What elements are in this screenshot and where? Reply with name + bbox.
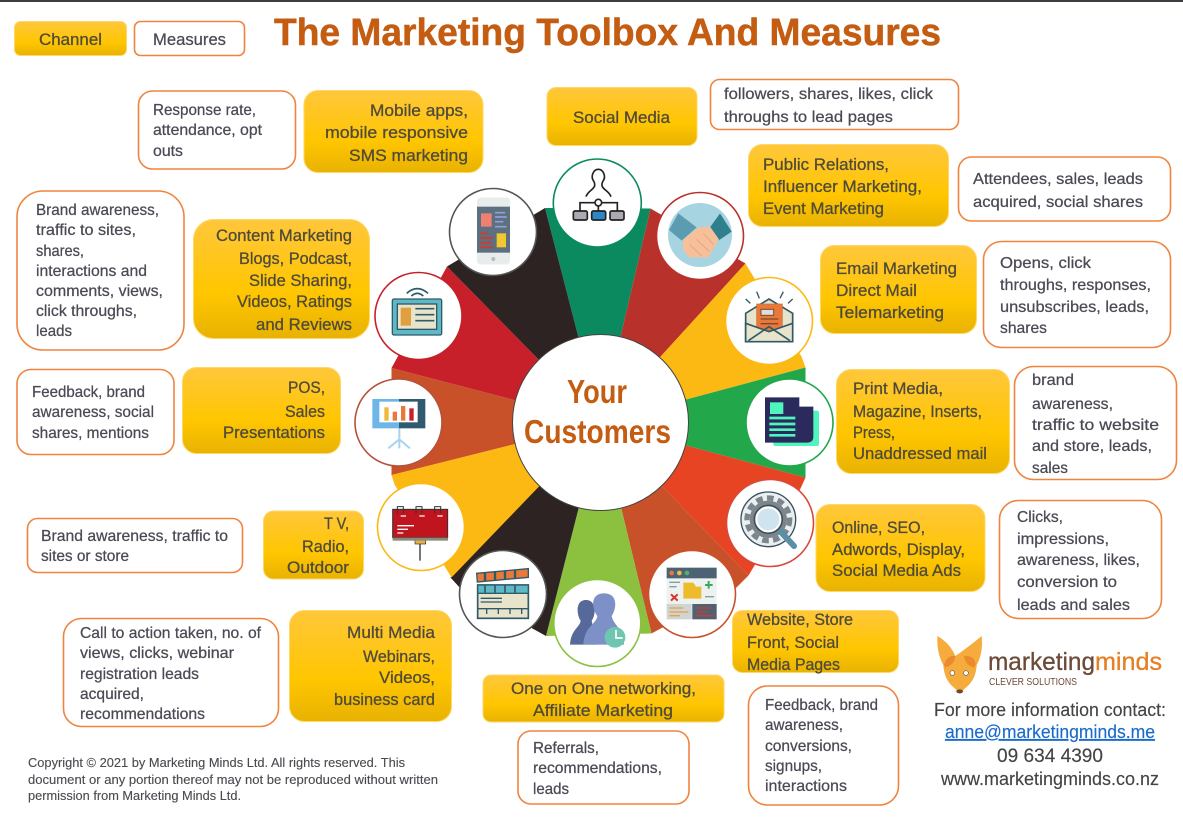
channel: email — [820, 246, 976, 334]
measures: public relations: acquired, social shares — [973, 194, 1143, 211]
measures: content marketing — [17, 191, 184, 350]
center circle: your customers: Your — [567, 373, 627, 410]
logo: wordmark — [988, 648, 1162, 688]
copyright notice: document or any portion thereof may not be reproduced without written — [28, 773, 438, 787]
channel: mobile: Mobile apps, — [370, 101, 468, 120]
channel: multi media: Webinars, — [363, 647, 435, 666]
channel: content marketing: Blogs, Podcast, — [239, 249, 352, 268]
channel: website: Website, Store — [747, 610, 853, 629]
legend: channel — [14, 22, 126, 56]
legend: channel: Channel — [39, 30, 102, 49]
measures: online: leads and sales — [1017, 597, 1130, 614]
channel: multi media: business card — [334, 690, 435, 709]
contact details: anne@marketingminds.me — [945, 722, 1155, 742]
channel: print media — [836, 370, 1010, 474]
logo: wordmark: marketing — [988, 648, 1095, 676]
channel: online: Social Media Ads — [832, 561, 961, 580]
legend: measures: Measures — [153, 30, 226, 49]
measures: online — [1000, 500, 1162, 618]
center circle: your customers — [512, 334, 688, 510]
measures: public relations — [958, 157, 1170, 221]
channel: content marketing: Slide Sharing, — [249, 271, 352, 290]
channel: content marketing: and Reviews — [256, 315, 352, 334]
wheel diagram — [355, 159, 833, 666]
measures: content marketing: interactions and — [36, 263, 147, 280]
channel: multi media: Multi Media — [347, 623, 436, 642]
measures: content marketing: Brand awareness, — [36, 202, 159, 219]
measures: print media: brand — [1032, 372, 1074, 389]
channel: social media — [547, 88, 697, 146]
channel: social media: Social Media — [573, 108, 671, 127]
channel: pos: Sales — [285, 402, 325, 421]
icon: website window — [667, 568, 717, 619]
measures: mobile: Response rate, — [153, 102, 256, 119]
measures: public relations: Attendees, sales, leads — [973, 171, 1143, 188]
measures: one on one: leads — [533, 781, 569, 798]
icon: envelope — [746, 292, 793, 342]
measures: social media: throughs to lead pages — [724, 109, 893, 126]
channel: public relations: Event Marketing — [763, 199, 884, 218]
channel: online: Adwords, Display, — [832, 540, 965, 559]
measures: online: Clicks, — [1017, 509, 1063, 526]
measures: multi media: recommendations — [80, 706, 205, 723]
measures: website: signups, — [765, 758, 822, 775]
measures: print media: and store, leads, — [1032, 438, 1152, 455]
channel: online — [816, 504, 985, 592]
measures: multi media — [64, 618, 278, 726]
measures: online: awareness, likes, — [1017, 552, 1140, 569]
icon: org chart person — [573, 169, 624, 220]
measures: print media — [1014, 366, 1176, 480]
icon: gear and magnifier — [741, 492, 796, 547]
channel: multi media: Videos, — [379, 668, 435, 687]
center circle: your customers: Customers — [524, 413, 671, 450]
channel: content marketing — [194, 220, 370, 338]
measures: multi media: acquired, — [80, 686, 144, 703]
measures: email: shares — [1000, 320, 1047, 337]
channel: email: Direct Mail — [836, 281, 917, 300]
measures: pos: awareness, social — [32, 404, 154, 421]
measures: one on one: Referrals, — [533, 740, 599, 757]
measures: content marketing: leads — [36, 323, 72, 340]
icon: people with clock — [570, 593, 625, 648]
measures: one on one: recommendations, — [533, 760, 662, 777]
channel: pos: Presentations — [223, 423, 325, 442]
measures: website: awareness, — [765, 717, 843, 734]
measures: pos: Feedback, brand — [32, 384, 145, 401]
channel: public relations: Public Relations, — [763, 155, 889, 174]
measures: website: conversions, — [765, 738, 852, 755]
copyright notice — [28, 756, 438, 803]
measures: print media: sales — [1032, 460, 1068, 477]
channel: multi media — [290, 610, 452, 722]
measures: social media — [710, 80, 958, 130]
channel: content marketing: Content Marketing — [216, 226, 352, 245]
measures: content marketing: traffic to sites, — [36, 222, 136, 239]
channel: content marketing: Videos, Ratings — [237, 292, 352, 311]
channel: tv radio outdoor — [264, 511, 364, 579]
icon: presentation board — [372, 399, 425, 448]
channel: mobile — [304, 90, 483, 172]
icon: tablet with wifi — [392, 289, 442, 335]
measures: multi media: Call to action taken, no. of — [80, 625, 262, 642]
measures: online: conversion to — [1017, 574, 1117, 591]
channel: tv radio outdoor: Radio, — [302, 537, 349, 556]
channel: print media: Press, — [853, 423, 895, 442]
wheel wedges — [392, 208, 806, 636]
channel: pos — [182, 368, 340, 454]
measures: social media: followers, shares, likes, click — [724, 86, 934, 103]
logo: wordmark: CLEVER SOLUTIONS — [989, 676, 1077, 688]
measures: online: impressions, — [1017, 531, 1109, 548]
copyright notice: Copyright © 2021 by Marketing Minds Ltd. All rights reserved. This — [28, 756, 405, 770]
icon: billboard — [393, 507, 448, 561]
measures: website: Feedback, brand — [765, 697, 878, 714]
measures: tv radio outdoor: Brand awareness, traffic to — [41, 528, 228, 545]
channel: website — [732, 610, 898, 674]
channel: one on one: Affiliate Marketing — [533, 701, 673, 720]
channel: tv radio outdoor: T V, — [324, 514, 349, 533]
measures: content marketing: shares, — [36, 243, 84, 260]
icon: mobile phone — [477, 198, 510, 264]
measures: mobile: outs — [153, 143, 183, 160]
channel: website: Front, Social — [747, 633, 839, 652]
channel: public relations — [748, 144, 948, 226]
measures: content marketing: click throughs, — [36, 303, 137, 320]
measures: pos: shares, mentions — [32, 425, 149, 442]
channel: print media: Print Media, — [853, 379, 943, 398]
measures: pos — [17, 370, 174, 454]
measures: mobile: attendance, opt — [153, 122, 263, 139]
channel: public relations: Influencer Marketing, — [763, 177, 922, 196]
measures: print media: awareness, — [1032, 396, 1113, 413]
channel: print media: Magazine, Inserts, — [853, 402, 982, 421]
measures: email — [984, 242, 1170, 348]
channel: one on one: One on One networking, — [511, 679, 696, 698]
channel: pos: POS, — [288, 378, 325, 397]
icon: handshake — [668, 203, 732, 267]
channel: mobile: mobile responsive — [325, 123, 468, 142]
copyright notice: permission from Marketing Minds Ltd. — [28, 789, 241, 803]
title: The Marketing Toolbox And Measures — [274, 12, 941, 54]
measures: website — [748, 686, 898, 805]
channel: website: Media Pages — [747, 655, 840, 674]
channel: print media: Unaddressed mail — [853, 444, 987, 463]
measures: mobile — [138, 91, 296, 169]
measures: email: throughs, responses, — [1000, 277, 1151, 294]
measures: print media: traffic to website — [1032, 417, 1159, 434]
measures: tv radio outdoor — [28, 518, 242, 572]
contact details: For more information contact: — [934, 700, 1166, 720]
channel: email: Telemarketing — [836, 303, 944, 322]
channel: tv radio outdoor: Outdoor — [287, 558, 349, 577]
legend: measures — [134, 22, 244, 56]
channel: mobile: SMS marketing — [349, 146, 468, 165]
icon: print documents — [765, 397, 819, 446]
measures: email: Opens, click — [1000, 255, 1092, 272]
measures: multi media: registration leads — [80, 666, 199, 683]
icon circles — [355, 159, 833, 666]
contact details — [934, 700, 1166, 789]
measures: content marketing: comments, views, — [36, 283, 163, 300]
measures: multi media: views, clicks, webinar — [80, 645, 235, 662]
icon: clapperboard — [477, 569, 528, 618]
measures: tv radio outdoor: sites or store — [41, 548, 129, 565]
channel: one on one — [483, 675, 724, 722]
logo: fox mascot — [937, 636, 982, 694]
contact details: www.marketingminds.co.nz — [940, 769, 1159, 789]
measures: email: unsubscribes, leads, — [1000, 299, 1149, 316]
channel: online: Online, SEO, — [832, 518, 925, 537]
measures: website: interactions — [765, 778, 847, 795]
logo: wordmark: minds — [1095, 648, 1162, 676]
channel: email: Email Marketing — [836, 259, 957, 278]
measures: one on one — [518, 731, 689, 804]
contact details: 09 634 4390 — [997, 746, 1103, 767]
